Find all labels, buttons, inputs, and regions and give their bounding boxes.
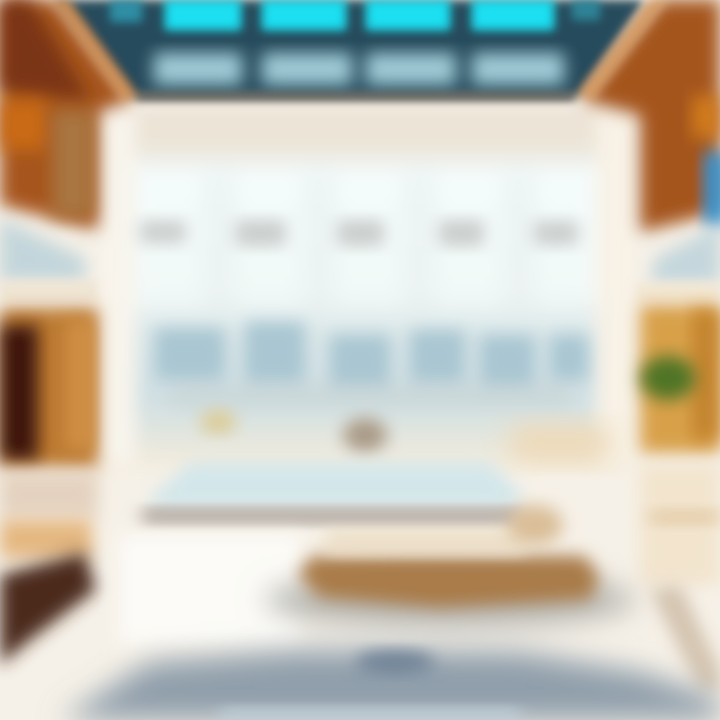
bed top bbox=[148, 462, 522, 508]
panel: skylight bbox=[55, 0, 645, 102]
right window shelf bbox=[650, 225, 720, 284]
horizon: mottled blue-grey skyline bbox=[155, 322, 588, 407]
icon: green plant bbox=[640, 356, 696, 400]
panel: tan sofa bbox=[265, 505, 635, 628]
right blue accent bbox=[704, 152, 720, 226]
skylight lower beam bbox=[135, 92, 575, 102]
floor glow bbox=[120, 535, 300, 645]
decor: central ornament bbox=[343, 418, 387, 452]
window mullions bbox=[212, 170, 526, 320]
left ceiling timber bbox=[0, 0, 132, 230]
bed base bbox=[142, 508, 522, 524]
panel: window wall bbox=[102, 108, 632, 468]
sofa cushion bbox=[507, 505, 563, 545]
panel: pale blue bed bbox=[142, 462, 522, 524]
left lower cabinet bbox=[0, 308, 98, 468]
skylight lower panes bbox=[154, 53, 564, 85]
right ceiling timber bbox=[582, 0, 720, 232]
panel: right wood wall bbox=[578, 0, 720, 690]
sofa body bbox=[298, 556, 600, 608]
left lower furniture bbox=[0, 472, 98, 518]
sofa shadow bbox=[265, 572, 635, 628]
sofa top bbox=[325, 530, 525, 554]
decor: right sill items bbox=[510, 425, 610, 461]
small decor on sill bbox=[200, 410, 610, 461]
right amber cabinet bbox=[640, 305, 720, 453]
panel: foreground blue-grey bedding bbox=[60, 650, 720, 720]
window panes: grey smudges bbox=[140, 220, 578, 246]
skylight frame bbox=[55, 0, 645, 96]
skylight cyan panes bbox=[110, 0, 600, 30]
left window shelf bbox=[0, 218, 85, 282]
decor: left ornament bbox=[200, 410, 236, 434]
right lower cream wall bbox=[640, 465, 720, 585]
panel: left wood wall bbox=[0, 0, 136, 665]
